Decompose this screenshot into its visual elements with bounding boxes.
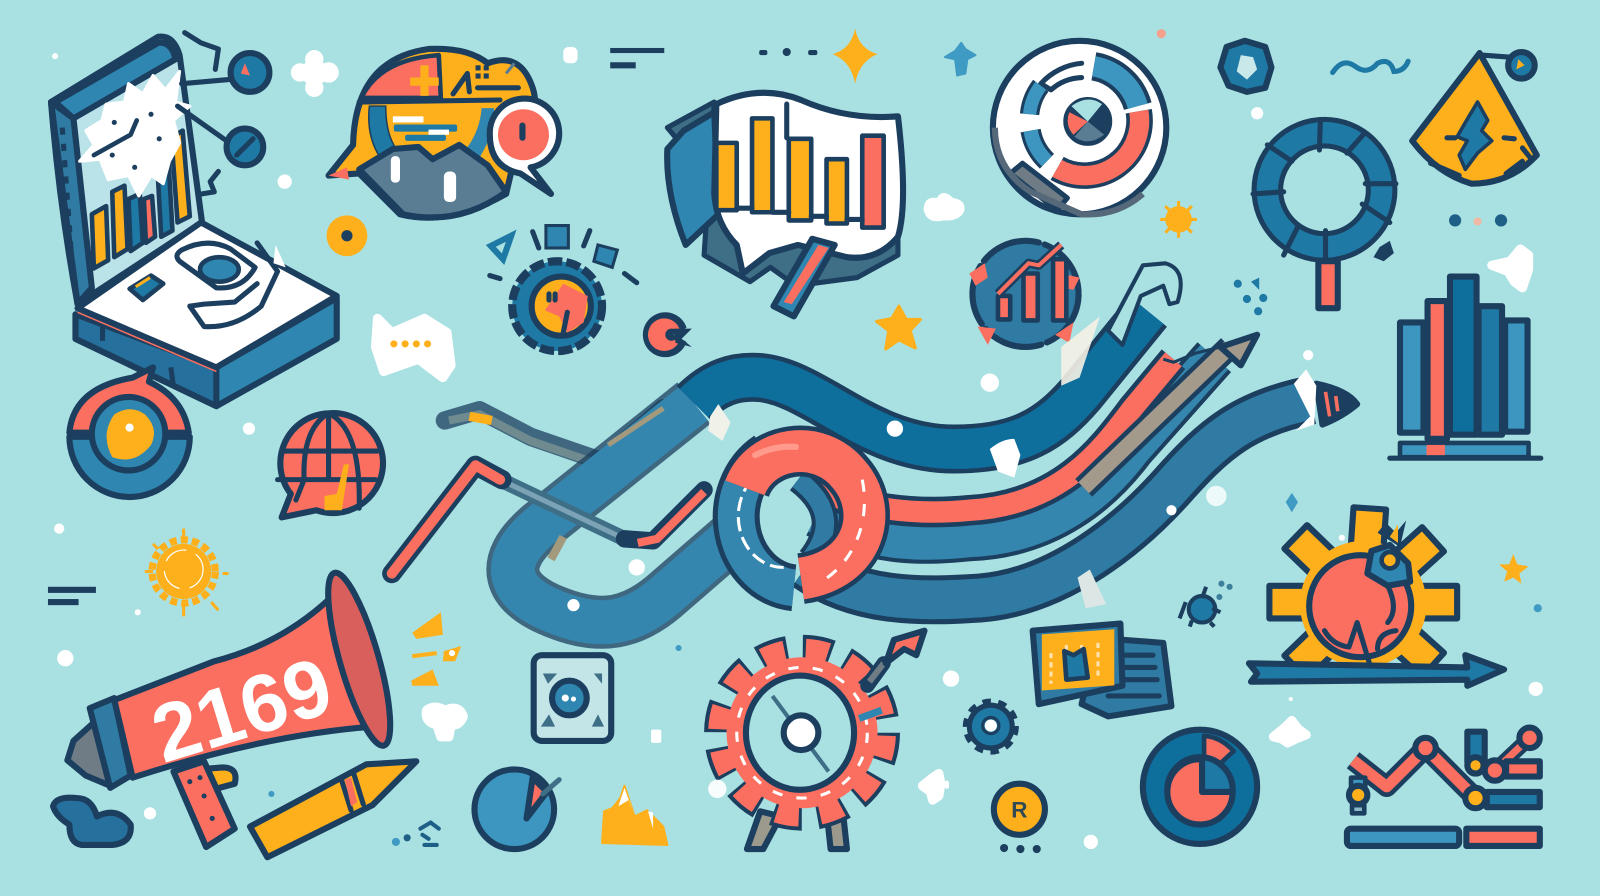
bars	[1400, 277, 1528, 439]
icon: blue pie with pointer	[474, 769, 559, 849]
icon: yellow pencil	[250, 761, 416, 857]
monitor icon	[1064, 649, 1088, 680]
monitor	[1033, 624, 1122, 704]
blue bird head	[1367, 520, 1410, 586]
lines left	[48, 587, 96, 605]
icon: yellow ring	[327, 215, 367, 256]
icon: small blue gear	[966, 702, 1015, 751]
white splat gear	[80, 71, 190, 196]
laptop screen	[51, 37, 202, 304]
icon: globe bubble	[278, 413, 383, 517]
small dark gear splat	[1180, 581, 1233, 627]
right nodes and bars	[1465, 728, 1540, 808]
left pendant	[1349, 778, 1367, 813]
icon: gear with rays	[490, 226, 637, 351]
bar chart on right	[1390, 277, 1541, 458]
rays	[490, 226, 637, 283]
megaphone collar	[90, 698, 131, 788]
grey handle band	[1010, 163, 1067, 210]
gear stitching	[737, 667, 867, 798]
megaphone horn	[316, 568, 403, 751]
main chart: intertwined ribbons and arrows	[392, 263, 1357, 622]
icon: yellow flame crown	[602, 786, 667, 845]
icon: line chart with bars	[1347, 728, 1540, 846]
bent grey line	[445, 408, 663, 465]
small bottom left particles	[392, 823, 439, 846]
icon: yellow pendant	[1412, 52, 1537, 184]
bars of decorative dashes top	[610, 48, 664, 68]
icon: yellow sparkle	[833, 29, 878, 84]
dots and dash top	[759, 48, 817, 56]
small scattered particles	[1234, 278, 1267, 315]
document	[1082, 638, 1171, 716]
top dark blue ribbon	[694, 263, 1181, 478]
bottom bars	[1347, 829, 1540, 846]
blue ring arc	[736, 455, 794, 588]
icon: coral and blue donut	[69, 367, 190, 497]
squiggle	[1333, 61, 1408, 72]
blue middle ribbon	[816, 357, 1214, 541]
megaphone body	[114, 592, 373, 778]
gear spoke and hub	[772, 696, 829, 771]
small grid panel	[359, 63, 518, 102]
icon: donut pie chart	[1143, 730, 1257, 844]
coloured tiny dots	[268, 29, 1542, 797]
icon: yellow star	[877, 306, 920, 349]
line series	[1353, 748, 1476, 798]
icon: big coral gear	[718, 631, 924, 849]
monitor display	[1042, 629, 1114, 690]
coral bent arrow line	[392, 465, 704, 574]
dial pie center	[1066, 99, 1109, 143]
small yellow sun	[1160, 201, 1197, 238]
network nodes	[178, 33, 269, 194]
yellow gear teeth	[1269, 507, 1457, 679]
icon: big sun	[145, 529, 229, 616]
coral ribbon	[816, 359, 1173, 512]
icon: white chat shape	[376, 318, 451, 378]
white bubble	[714, 93, 903, 273]
icon: sun gear over arrow	[1249, 507, 1504, 686]
icon: mini chart circle	[969, 241, 1080, 347]
U-shaped blue ribbon	[513, 403, 740, 622]
white cloud	[923, 193, 965, 221]
gear legs	[747, 811, 847, 849]
cross mark	[410, 65, 439, 96]
yellow sound sparks	[411, 612, 461, 686]
speech bubble bar chart	[667, 93, 903, 316]
blue side stripes and text lines	[369, 106, 494, 167]
grey mountains	[329, 145, 506, 217]
marker	[773, 239, 835, 316]
gear arrow	[867, 631, 924, 686]
icon: R coin	[994, 784, 1045, 853]
icon: square fan tile	[534, 655, 611, 741]
gear hole	[746, 676, 854, 790]
megaphone tail cap	[67, 723, 110, 786]
yellow bubble body	[329, 49, 535, 218]
inner dark crescent	[798, 480, 825, 559]
bubble shadow	[667, 102, 898, 286]
base arrow	[1249, 655, 1504, 686]
icon: target dial	[993, 41, 1166, 214]
base strip	[1390, 443, 1541, 458]
icon: laptop with bar chart	[51, 33, 337, 406]
gear teeth	[718, 649, 886, 816]
blue side	[667, 112, 718, 245]
number text: 2169	[142, 640, 342, 781]
three dots	[1449, 214, 1507, 227]
bottom blue arrow ribbon	[806, 369, 1357, 608]
bars	[716, 104, 884, 228]
coral panel	[361, 55, 441, 98]
icon: blue blob hexagon	[1220, 41, 1271, 92]
chart bars on screen	[92, 131, 190, 268]
icon: blue cloud	[53, 798, 131, 845]
icon: megaphone	[67, 568, 403, 847]
icon: magnifier ring	[1253, 119, 1396, 308]
megaphone handle	[173, 761, 236, 847]
coral gauge bubble	[490, 99, 559, 194]
laptop base	[76, 222, 337, 406]
coral circle	[1309, 555, 1411, 657]
dial ring segments	[1030, 63, 1140, 176]
grey pencil arrow	[1084, 335, 1257, 488]
icon: R coin: R	[1011, 797, 1027, 822]
icon: coral pacman	[643, 312, 696, 357]
icon: round bubble with mountains	[329, 49, 559, 218]
icon: blue cross	[945, 43, 976, 76]
upper bar	[1467, 732, 1485, 762]
coral ring arc	[745, 447, 864, 580]
icon: monitor and document	[1033, 624, 1171, 716]
gear body	[512, 261, 602, 351]
